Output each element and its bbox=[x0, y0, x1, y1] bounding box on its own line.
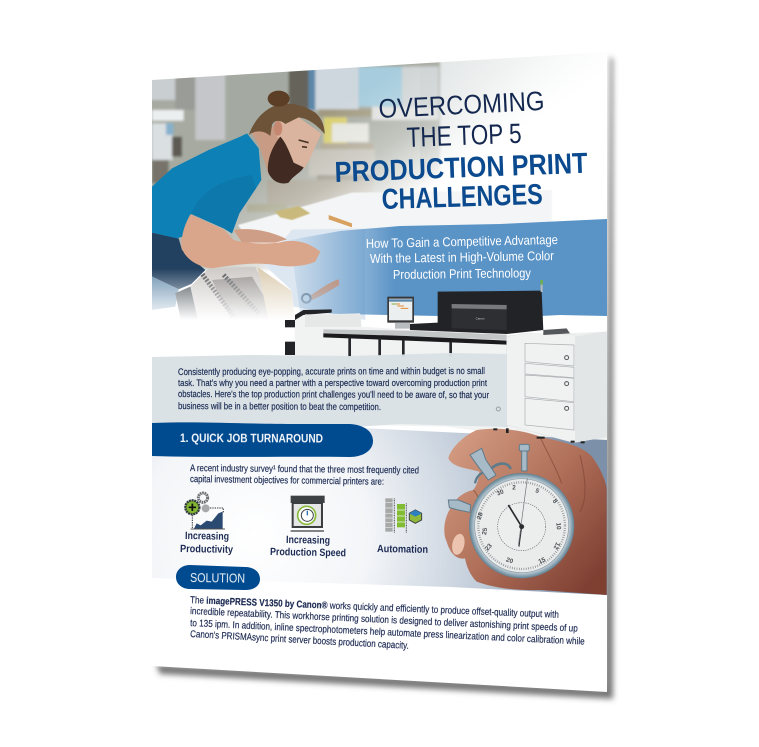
label: increasing production speed: Increasing bbox=[286, 534, 330, 547]
shirt shadow bbox=[191, 175, 256, 233]
hair bun bbox=[268, 91, 290, 107]
printer front lid bbox=[452, 308, 506, 330]
dial numerals: 5 bbox=[534, 487, 540, 495]
dial numerals: 23 bbox=[484, 542, 494, 552]
stopwatch dial bbox=[475, 479, 569, 573]
printer door gaps bbox=[348, 337, 452, 357]
control monitor bbox=[387, 297, 414, 329]
header pill bbox=[152, 422, 373, 457]
stopwatch subdial bbox=[498, 503, 546, 551]
dial numerals: 10 bbox=[554, 522, 562, 530]
survey line 2: capital investment objectives for commercial printers are: bbox=[190, 474, 384, 488]
deck top tray bbox=[543, 328, 570, 335]
sheet in front bbox=[264, 228, 365, 320]
face bbox=[275, 117, 321, 168]
title line: the top 5: THE TOP 5 bbox=[406, 118, 522, 153]
hand bbox=[444, 429, 607, 595]
colour bar on paper bbox=[329, 215, 352, 227]
intro line 4: business will be in a better position to beat the competition. bbox=[178, 401, 381, 413]
title bbox=[334, 86, 588, 216]
deck side panel bbox=[575, 332, 608, 443]
icon: increasing production speed bbox=[291, 496, 325, 531]
printer paper deck bbox=[493, 328, 608, 443]
dial numerals: 8 bbox=[551, 498, 559, 505]
hair bbox=[249, 104, 325, 136]
dial scale bbox=[478, 482, 565, 569]
dial numerals: 30 bbox=[496, 488, 505, 498]
back hand bbox=[234, 229, 287, 243]
title line: overcoming: OVERCOMING bbox=[378, 86, 545, 124]
machine below the table bbox=[190, 266, 268, 317]
survey line 1: A recent industry survey¹ found that the three most frequently cited bbox=[190, 463, 419, 476]
solution paragraph bbox=[190, 595, 585, 652]
photo: hand holding stopwatch bbox=[444, 429, 607, 595]
printer brand badge: Canon bbox=[476, 317, 485, 321]
infographic canvas bbox=[152, 55, 618, 703]
dial numerals: 15 bbox=[537, 556, 547, 566]
stopwatch case bbox=[469, 473, 574, 578]
icon: automation bbox=[385, 498, 422, 533]
dial numerals bbox=[476, 484, 562, 566]
polo shirt bbox=[152, 133, 261, 238]
label: increasing productivity bbox=[180, 530, 233, 556]
deck drawers bbox=[525, 343, 574, 430]
neck bbox=[252, 126, 278, 175]
deck drawer handles bbox=[496, 356, 569, 411]
beard bbox=[268, 137, 304, 183]
solution line 2: incredible repeatability. This workhorse printing solution is designed to deliver astonishing print speeds of up bbox=[190, 606, 578, 635]
intro band bbox=[152, 353, 508, 428]
intro paragraph bbox=[178, 366, 489, 413]
thumb nail bbox=[450, 533, 466, 556]
dial numerals: 2 bbox=[512, 484, 516, 491]
icon: increasing productivity bbox=[185, 493, 225, 529]
ear bbox=[274, 121, 282, 136]
photo: workshop background right bbox=[424, 56, 552, 152]
printer body bbox=[293, 313, 608, 443]
icon labels bbox=[180, 530, 428, 559]
survey text bbox=[190, 463, 419, 488]
solution label: SOLUTION bbox=[190, 571, 245, 586]
page shadow bbox=[156, 56, 613, 699]
dark band across printer bbox=[323, 333, 507, 345]
photo: worktable and paper bbox=[238, 190, 552, 320]
stopwatch hands bbox=[508, 478, 527, 547]
title line: production print: PRODUCTION PRINT bbox=[334, 148, 588, 189]
dial numerals: 20 bbox=[505, 556, 514, 566]
status light tower bbox=[540, 280, 543, 292]
dial numerals: 12 bbox=[551, 541, 561, 551]
printer bbox=[285, 280, 608, 443]
subtitle line 2: With the Latest in High-Volume Color bbox=[370, 248, 555, 266]
gradient panel bbox=[152, 423, 607, 595]
page contents clipped to the sheet bbox=[149, 50, 608, 595]
subtitle line 1: How To Gain a Competitive Advantage bbox=[366, 232, 558, 251]
section heading: 1. QUICK JOB TURNAROUND bbox=[180, 433, 323, 445]
solution line 3: to 135 ipm. In addition, inline spectrophotometers help automate press linearization and color calibration while bbox=[190, 618, 585, 648]
large paper sheet bbox=[238, 190, 552, 244]
label: increasing productivity: Productivity bbox=[180, 543, 233, 556]
solution line 4: Canon's PRISMAsync print server boosts production capacity. bbox=[190, 629, 409, 652]
tool on paper bbox=[302, 279, 339, 303]
dial numerals: 28 bbox=[476, 511, 485, 521]
solution pill bbox=[176, 565, 260, 590]
title line: challenges: CHALLENGES bbox=[381, 179, 543, 216]
intro line 2: task. That's why you need a partner with a perspective toward overcoming production print bbox=[178, 378, 487, 389]
dial numerals: 25 bbox=[481, 527, 489, 535]
intro line 3: obstacles. Here's the top production print challenges you'll need to be aware of, so that your bbox=[178, 389, 489, 401]
subtitle line 3: Production Print Technology bbox=[393, 265, 531, 282]
deck feet bbox=[493, 428, 585, 443]
printer dark top unit bbox=[410, 291, 543, 334]
label: increasing productivity: Increasing bbox=[185, 530, 229, 543]
page sheet bbox=[152, 52, 607, 692]
stopwatch crown and pushers bbox=[448, 444, 529, 512]
label: automation: Automation bbox=[377, 543, 428, 556]
hand creases bbox=[473, 437, 585, 512]
forearm and hand bbox=[181, 214, 320, 268]
wood table edge bbox=[257, 266, 294, 314]
solution line 1: The imagePRESS V1350 by Canon® works quickly and efficiently to produce offset-quality output with bbox=[190, 595, 559, 621]
folded gold paper bbox=[275, 206, 310, 220]
label: increasing production speed bbox=[270, 534, 346, 559]
subtitle bbox=[366, 232, 558, 282]
grey top rail bbox=[323, 329, 507, 340]
intro line 1: Consistently producing eye-popping, accurate prints on time and within budget is no small bbox=[178, 366, 485, 378]
photo: pressman leaning over table bbox=[152, 91, 339, 328]
trousers bbox=[152, 233, 205, 289]
eye and brow bbox=[299, 140, 309, 147]
label: increasing production speed: Production Speed bbox=[270, 546, 346, 559]
photo: workshop background bbox=[149, 60, 440, 270]
blue subtitle band bbox=[290, 219, 607, 318]
paper feeder at left bbox=[285, 309, 332, 355]
